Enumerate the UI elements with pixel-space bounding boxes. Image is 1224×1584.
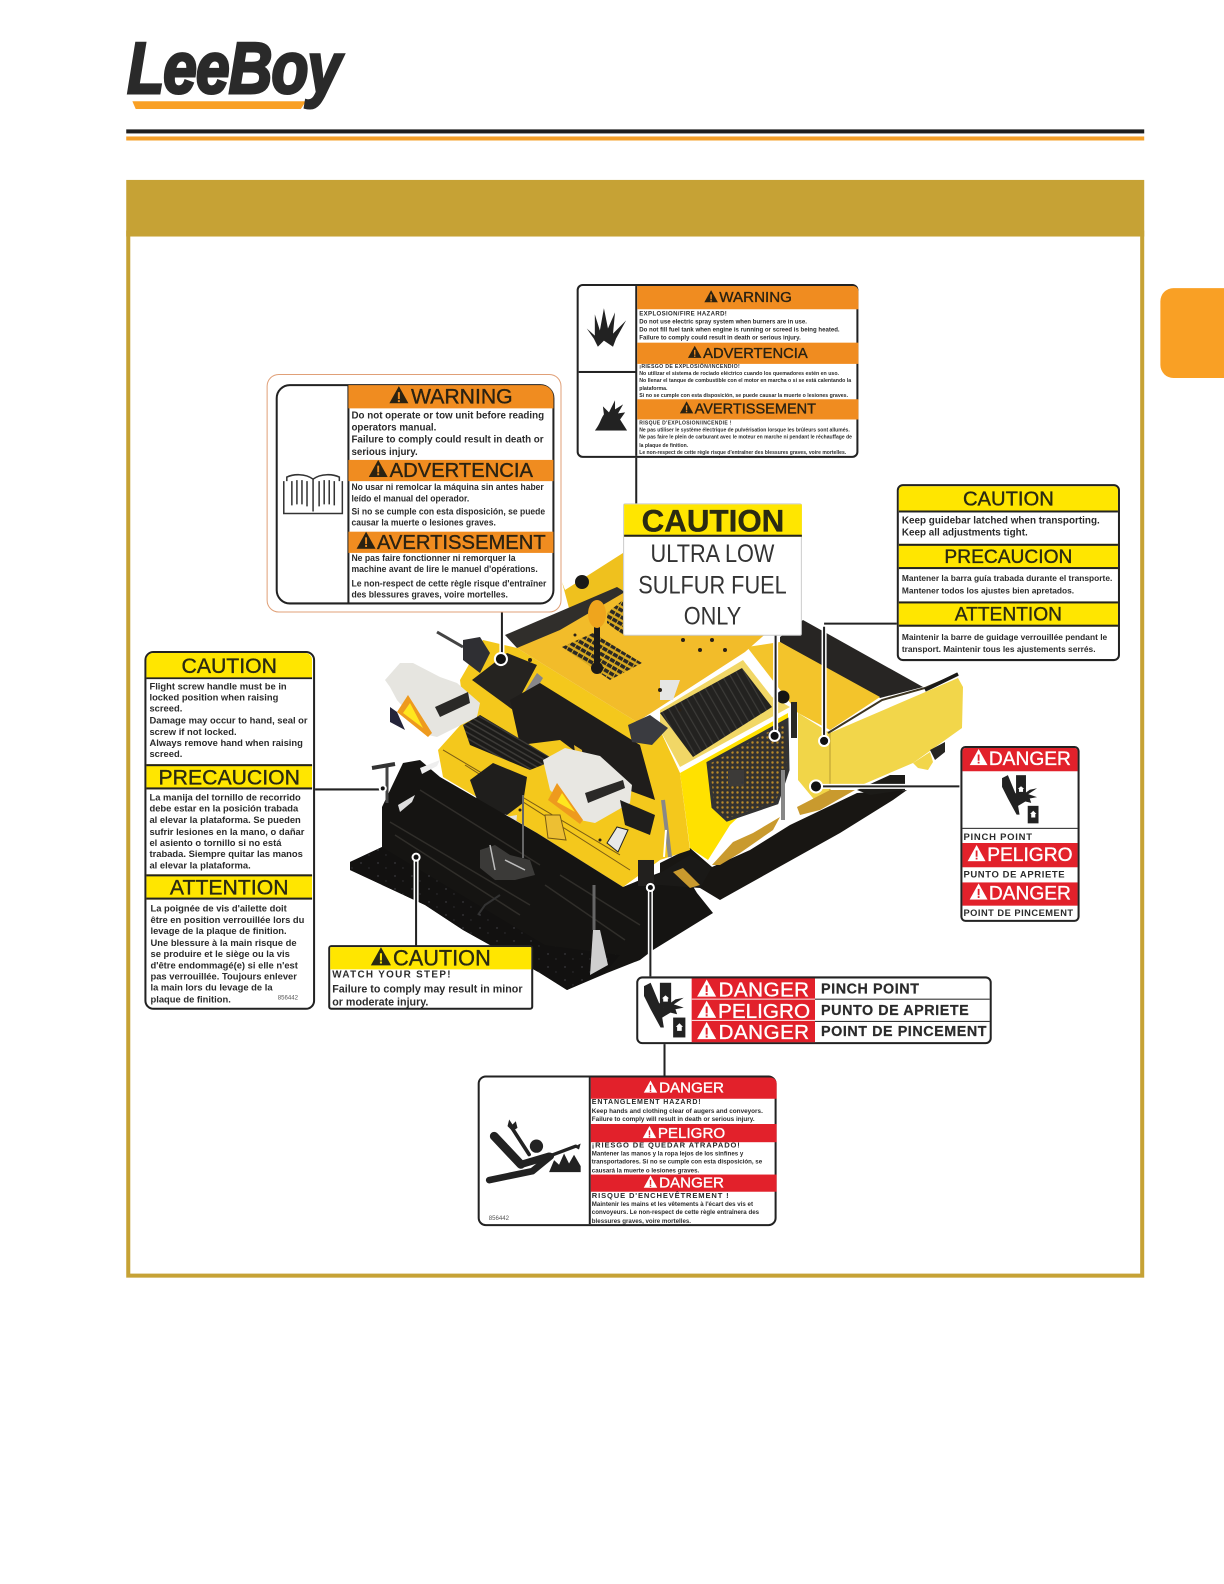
decal: entanglement danger bbox=[478, 1075, 777, 1226]
text: advertencia bbox=[351, 482, 545, 528]
text: advertencia: Si no se cumple con esta disposición, se puede bbox=[351, 506, 545, 517]
decal: watch your step bbox=[328, 945, 533, 1010]
text: precaucion: trabada. Siempre quitar las manos bbox=[149, 849, 303, 859]
text: precaucion: La manija del tornillo de recorrido bbox=[149, 792, 301, 803]
text: caution: screed. bbox=[149, 704, 182, 714]
decal: book warning bbox=[267, 374, 562, 613]
icon: flame bbox=[595, 400, 627, 431]
heading: avertissement bbox=[637, 399, 858, 419]
text: attention: être en position verrouillée lors du bbox=[150, 915, 304, 925]
heading: danger bbox=[962, 748, 1078, 771]
text: warning: Do not use electric spray system when burners are in use. bbox=[639, 319, 807, 325]
text: attention bbox=[150, 904, 304, 1004]
heading: caution bbox=[146, 653, 312, 679]
logo: LeeBoy bbox=[126, 28, 346, 110]
text: danger french: convoyeurs. Le non-respect de cette règle entraînera des bbox=[592, 1209, 759, 1216]
text: avertissement: Le non-respect de cette règle risque d'entraîner bbox=[351, 578, 546, 588]
heading: warning bbox=[348, 385, 553, 408]
text: caution: screw if not locked. bbox=[149, 727, 237, 737]
text: precaucion: al elevar la plataforma. bbox=[149, 860, 251, 871]
heading: avertissement: AVERTISSEMENT bbox=[695, 401, 816, 417]
text: avertissement: Ne pas faire fonctionner ni remorquer la bbox=[351, 553, 516, 563]
heading: precaucion: PRECAUCION bbox=[159, 766, 300, 789]
text: avertissement: Le non-respect de cette règle risque d'entraîner des blessures graves, voire mortelles. bbox=[639, 450, 846, 456]
heading: advertencia: ADVERTENCIA bbox=[703, 346, 808, 362]
heading: danger: DANGER bbox=[659, 1080, 724, 1097]
heading: precaucion bbox=[899, 544, 1118, 569]
text: punto de apriete: PUNTO DE APRIETE bbox=[963, 868, 1065, 879]
text: pinch point translations: PUNTO DE APRIETE bbox=[821, 1003, 969, 1019]
text: danger french: blessures graves, voire mortelles. bbox=[592, 1218, 691, 1225]
text: attention: Une blessure à la main risque de bbox=[150, 938, 297, 948]
text: caution: Damage may occur to hand, seal or bbox=[149, 715, 308, 725]
text: peligro spanish bbox=[592, 1140, 762, 1174]
text: peligro spanish: Mantener las manos y la ropa lejos de los sinfines y bbox=[592, 1150, 743, 1158]
heading: caution: CAUTION bbox=[963, 488, 1054, 510]
text: warning: Do not operate or tow unit before reading bbox=[351, 410, 544, 422]
icon: pinch hand bbox=[1002, 775, 1038, 824]
part number: 856442 bbox=[489, 1216, 509, 1222]
text: attention: plaque de finition. bbox=[150, 994, 231, 1004]
decal: pinch point vertical bbox=[960, 746, 1080, 922]
text: warning: Do not fill fuel tank when engine is running or screed is being heated. bbox=[639, 327, 840, 334]
heading: advertencia bbox=[348, 460, 553, 481]
text: danger english: Failure to comply will result in death or serious injury. bbox=[592, 1116, 755, 1123]
heading: peligro: PELIGRO bbox=[658, 1125, 725, 1142]
beacon bbox=[575, 575, 606, 674]
text: advertencia: ¡RIESGO DE EXPLOSIÓN/INCENDIO! bbox=[639, 364, 740, 370]
text: pinch point translations: POINT DE PINCEMENT bbox=[821, 1024, 987, 1040]
text: advertencia bbox=[639, 363, 852, 399]
text: fuel notice: SULFUR FUEL bbox=[638, 571, 787, 599]
text: attention: la main lors du levage de la bbox=[150, 983, 273, 993]
icon: explosion bbox=[586, 308, 626, 347]
text: attention: se produire et le siège ou la vis bbox=[150, 949, 290, 959]
heading: attention bbox=[899, 601, 1118, 627]
heading: warning bbox=[637, 286, 858, 309]
heading: danger: DANGER bbox=[989, 883, 1071, 905]
heading: danger: DANGER bbox=[659, 1175, 724, 1192]
text: avertissement: Ne pas faire le plein de carburant avec le moteur en marche ni pendant le réchauffage de bbox=[639, 435, 852, 441]
text: precaucion: Mantener la barra guía trabada durante el transporte. bbox=[902, 573, 1112, 583]
text: caution: Keep guidebar latched when transporting. bbox=[902, 516, 1100, 527]
text: caution: Keep all adjustments tight. bbox=[902, 528, 1028, 539]
heading: warning: WARNING bbox=[719, 289, 792, 306]
text: warning: operators manual. bbox=[351, 423, 436, 434]
decal: ultra low sulfur fuel bbox=[623, 503, 802, 636]
heading: peligro: PELIGRO bbox=[987, 845, 1073, 866]
heading: danger: DANGER bbox=[989, 749, 1071, 770]
text: caution: screed. bbox=[149, 749, 182, 759]
decal: pinch point horizontal bbox=[636, 976, 992, 1044]
text: pinch point translations bbox=[821, 981, 987, 1040]
text: advertencia: plataforma. bbox=[639, 386, 668, 392]
logo wordmark: LeeBoy bbox=[127, 28, 340, 109]
text: attention bbox=[902, 632, 1107, 654]
crawler tracks bbox=[660, 775, 907, 900]
text: advertencia: No llenar el tanque de combustible con el motor en marcha o si se está calentando la bbox=[639, 378, 851, 385]
heading: attention: ATTENTION bbox=[170, 876, 289, 900]
text: fuel notice: ULTRA LOW bbox=[651, 540, 774, 568]
text: precaucion: sufrir lesiones en la mano, o dañar bbox=[149, 826, 304, 837]
white seat consoles bbox=[385, 632, 668, 852]
decal: watch your step: Failure to comply may result in minor bbox=[332, 984, 523, 996]
text: attention: d'être endommagé(e) si elle n'est bbox=[150, 960, 298, 970]
text: caution: WATCH YOUR STEP! bbox=[332, 969, 452, 980]
text: danger english bbox=[592, 1099, 763, 1123]
heading: advertencia bbox=[637, 343, 858, 364]
decal: watch your step: or moderate injury. bbox=[332, 997, 428, 1009]
text: warning: Failure to comply could result in death or serious injury. bbox=[639, 336, 801, 342]
text: caution: Flight screw handle must be in bbox=[149, 681, 287, 691]
icon: open book bbox=[283, 474, 344, 514]
icon: pinch hand bbox=[644, 982, 686, 1038]
decal: explosion fire warning bbox=[577, 284, 858, 458]
heading: danger bbox=[591, 1175, 777, 1192]
decal: guidebar caution bbox=[897, 484, 1120, 661]
text: warning bbox=[639, 311, 840, 342]
text: attention: La poignée de vis d'ailette doit bbox=[150, 904, 287, 914]
text: caution: locked position when raising bbox=[149, 693, 278, 703]
text: fuel notice: ONLY bbox=[684, 602, 741, 631]
text: advertencia: No usar ni remolcar la máquina sin antes haber bbox=[351, 482, 544, 492]
text: attention: pas verrouillée. Toujours enlever bbox=[150, 972, 297, 982]
text: precaucion bbox=[149, 792, 304, 871]
icon: falling person bbox=[486, 1120, 581, 1184]
section tab bbox=[1160, 288, 1224, 378]
text: danger french bbox=[592, 1191, 759, 1225]
screed bbox=[350, 760, 783, 990]
part number: 856442 bbox=[278, 996, 298, 1002]
leader lines bbox=[315, 458, 959, 1075]
text: precaucion: debe estar en la posición trabada bbox=[149, 804, 298, 814]
text: attention: levage de la plaque de finition. bbox=[150, 926, 287, 936]
text: caution bbox=[149, 681, 308, 759]
text: attention: Maintenir la barre de guidage verrouillée pendant le bbox=[902, 632, 1107, 642]
heading: caution: CAUTION bbox=[182, 655, 277, 678]
text: danger english: Keep hands and clothing clear of augers and conveyors. bbox=[592, 1107, 763, 1114]
text: advertencia: Si no se cumple con esta disposición, se puede causar la muerte o lesiones graves. bbox=[639, 393, 848, 399]
text: precaucion bbox=[902, 573, 1112, 595]
text: warning bbox=[351, 410, 544, 458]
text: peligro spanish: ¡RIESGO DE QUEDAR ATRAPADO! bbox=[592, 1140, 741, 1149]
heading: precaucion: PRECAUCION bbox=[944, 547, 1072, 568]
text: pinch point translations: PINCH POINT bbox=[821, 981, 920, 998]
text: advertencia: leído el manual del operador. bbox=[351, 493, 469, 503]
heading: attention bbox=[146, 874, 312, 900]
text: avertissement: des blessures graves, voire mortelles. bbox=[351, 589, 508, 599]
text: avertissement: RISQUE D'EXPLOSION/INCENDIE ! bbox=[639, 420, 732, 427]
text: caution: Always remove hand when raising bbox=[149, 738, 303, 748]
text: avertissement: Ne pas utiliser le système électrique de pulvérisation lorsque les brûleurs sont allumés. bbox=[639, 428, 850, 434]
heading: peligro bbox=[591, 1124, 777, 1142]
heading: attention: ATTENTION bbox=[955, 604, 1062, 626]
heading: peligro bbox=[962, 843, 1078, 867]
text: peligro spanish: transportadores. Si no se cumple con esta disposición, se bbox=[592, 1159, 762, 1166]
text: danger french: RISQUE D'ENCHEVÊTREMENT ! bbox=[592, 1191, 730, 1200]
text: warning: EXPLOSION/FIRE HAZARD! bbox=[639, 311, 727, 317]
text: point de pincement: POINT DE PINCEMENT bbox=[963, 908, 1074, 918]
text: avertissement: la plaque de finition. bbox=[639, 442, 688, 448]
heading: danger bbox=[591, 1078, 777, 1099]
text: precaucion: el asiento o tornillo si no está bbox=[149, 838, 281, 848]
text: precaucion: Mantener todos los ajustes bien apretados. bbox=[902, 585, 1074, 595]
text: avertissement: machine avant de lire le manuel d'opérations. bbox=[351, 564, 538, 574]
text: avertissement bbox=[351, 553, 546, 600]
text: advertencia: causar la muerte o lesiones graves. bbox=[351, 518, 496, 528]
logo orange swoosh bbox=[132, 101, 306, 109]
decal: flight screw caution bbox=[144, 651, 315, 1010]
text: danger french: Maintenir les mains et les vêtements à l'écart des vis et bbox=[592, 1201, 753, 1208]
text: pinch point: PINCH POINT bbox=[963, 831, 1033, 842]
tractor body bbox=[438, 553, 797, 887]
heading: warning: WARNING bbox=[411, 385, 513, 408]
main panel bbox=[126, 230, 1144, 1278]
heading: caution bbox=[899, 486, 1118, 512]
text: caution bbox=[902, 516, 1100, 539]
hopper bbox=[747, 620, 963, 803]
text: pinch point bbox=[962, 828, 1078, 843]
text: fuel notice bbox=[638, 540, 787, 631]
text: advertencia: No utilizar el sistema de rociado eléctrico cuando los quemadores estén en uso. bbox=[639, 371, 839, 377]
heading: caution bbox=[330, 947, 531, 969]
text: precaucion: al elevar la plataforma. Se pueden bbox=[149, 815, 301, 825]
text: peligro spanish: causará la muerte o lesiones graves. bbox=[592, 1167, 699, 1174]
panel heading bar bbox=[126, 180, 1144, 237]
heading stack: danger peligro danger bbox=[692, 978, 815, 1042]
text: warning: Failure to comply could result in death or bbox=[351, 435, 544, 446]
text: attention: transport. Maintenir tous les ajustements serrés. bbox=[902, 644, 1096, 654]
text: danger english: ENTANGLEMENT HAZARD! bbox=[592, 1099, 702, 1106]
heading: danger bbox=[962, 882, 1078, 906]
text: avertissement bbox=[639, 420, 852, 456]
text: warning: serious injury. bbox=[351, 447, 418, 458]
